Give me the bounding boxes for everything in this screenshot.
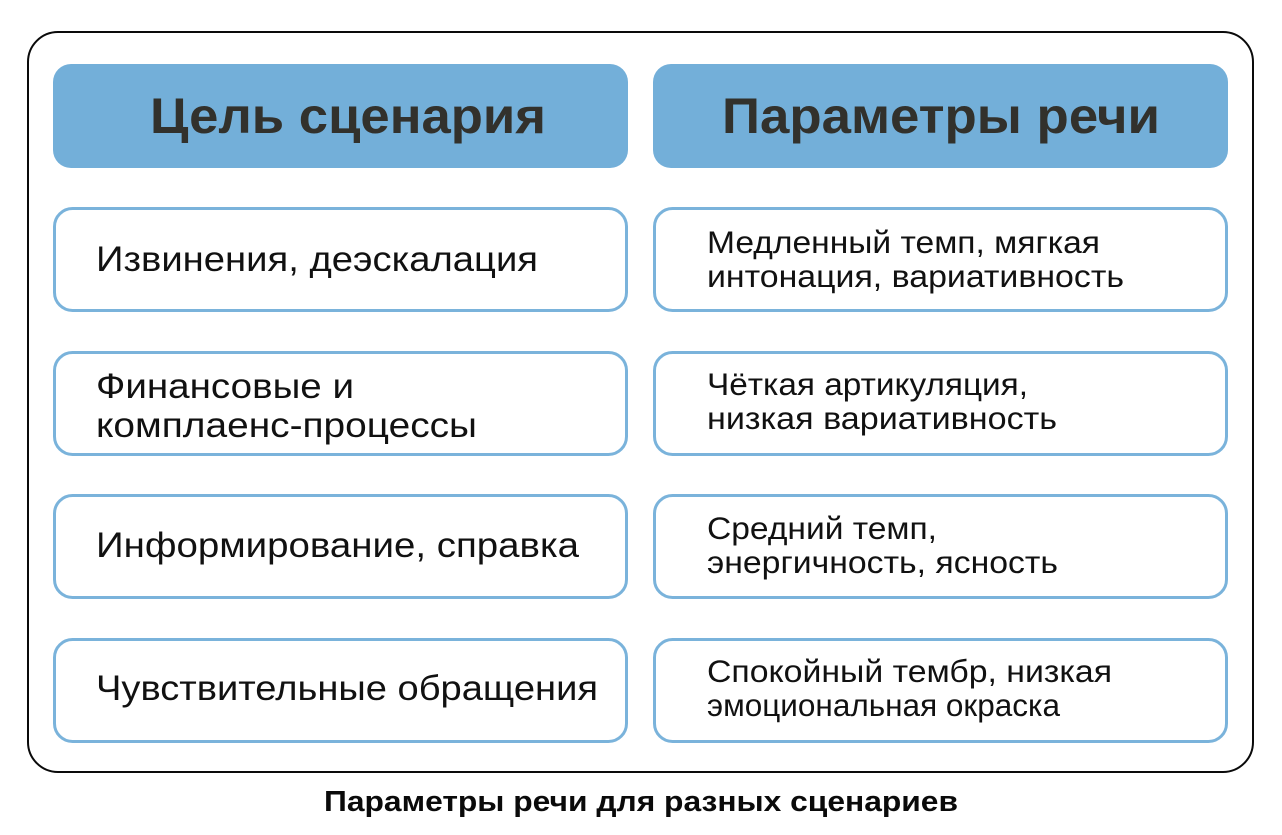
- heading: scenario goal: [53, 64, 628, 168]
- heading: speech parameters: [653, 64, 1228, 168]
- row 2 parameters: Чёткая артикуляция,: [707, 366, 1028, 402]
- row 2 goal: комплаенс-процессы: [96, 405, 477, 445]
- row 4 parameters: эмоциональная окраска: [707, 687, 1060, 723]
- row 4 goal: Чувствительные обращения: [96, 668, 598, 708]
- heading: scenario goal: Цель сценария: [150, 88, 546, 144]
- row 4 parameters: Спокойный тембр, низкая: [707, 653, 1112, 689]
- row 3 parameters: энергичность, ясность: [707, 544, 1058, 580]
- row 2 goal: Финансовые и: [96, 366, 354, 406]
- row 1 goal: [54, 208, 626, 310]
- caption: Параметры речи для разных сценариев: [324, 786, 958, 818]
- row 2 parameters: низкая вариативность: [707, 400, 1057, 436]
- row 1 parameters: [654, 208, 1226, 310]
- row 3 goal: [54, 496, 626, 598]
- row 2 parameters: [654, 352, 1226, 454]
- row 1 goal: Извинения, деэскалация: [96, 239, 538, 279]
- row 1 parameters: интонация, вариативность: [707, 258, 1124, 294]
- row 1 parameters: Медленный темп, мягкая: [707, 224, 1100, 260]
- heading: speech parameters: Параметры речи: [722, 88, 1160, 144]
- row 3 parameters: [654, 496, 1226, 598]
- row 2 goal: [54, 352, 626, 454]
- row 3 goal: Информирование, справка: [96, 525, 579, 565]
- row 3 parameters: Средний темп,: [707, 510, 937, 546]
- row 4 parameters: [654, 640, 1226, 742]
- row 4 goal: [54, 640, 626, 742]
